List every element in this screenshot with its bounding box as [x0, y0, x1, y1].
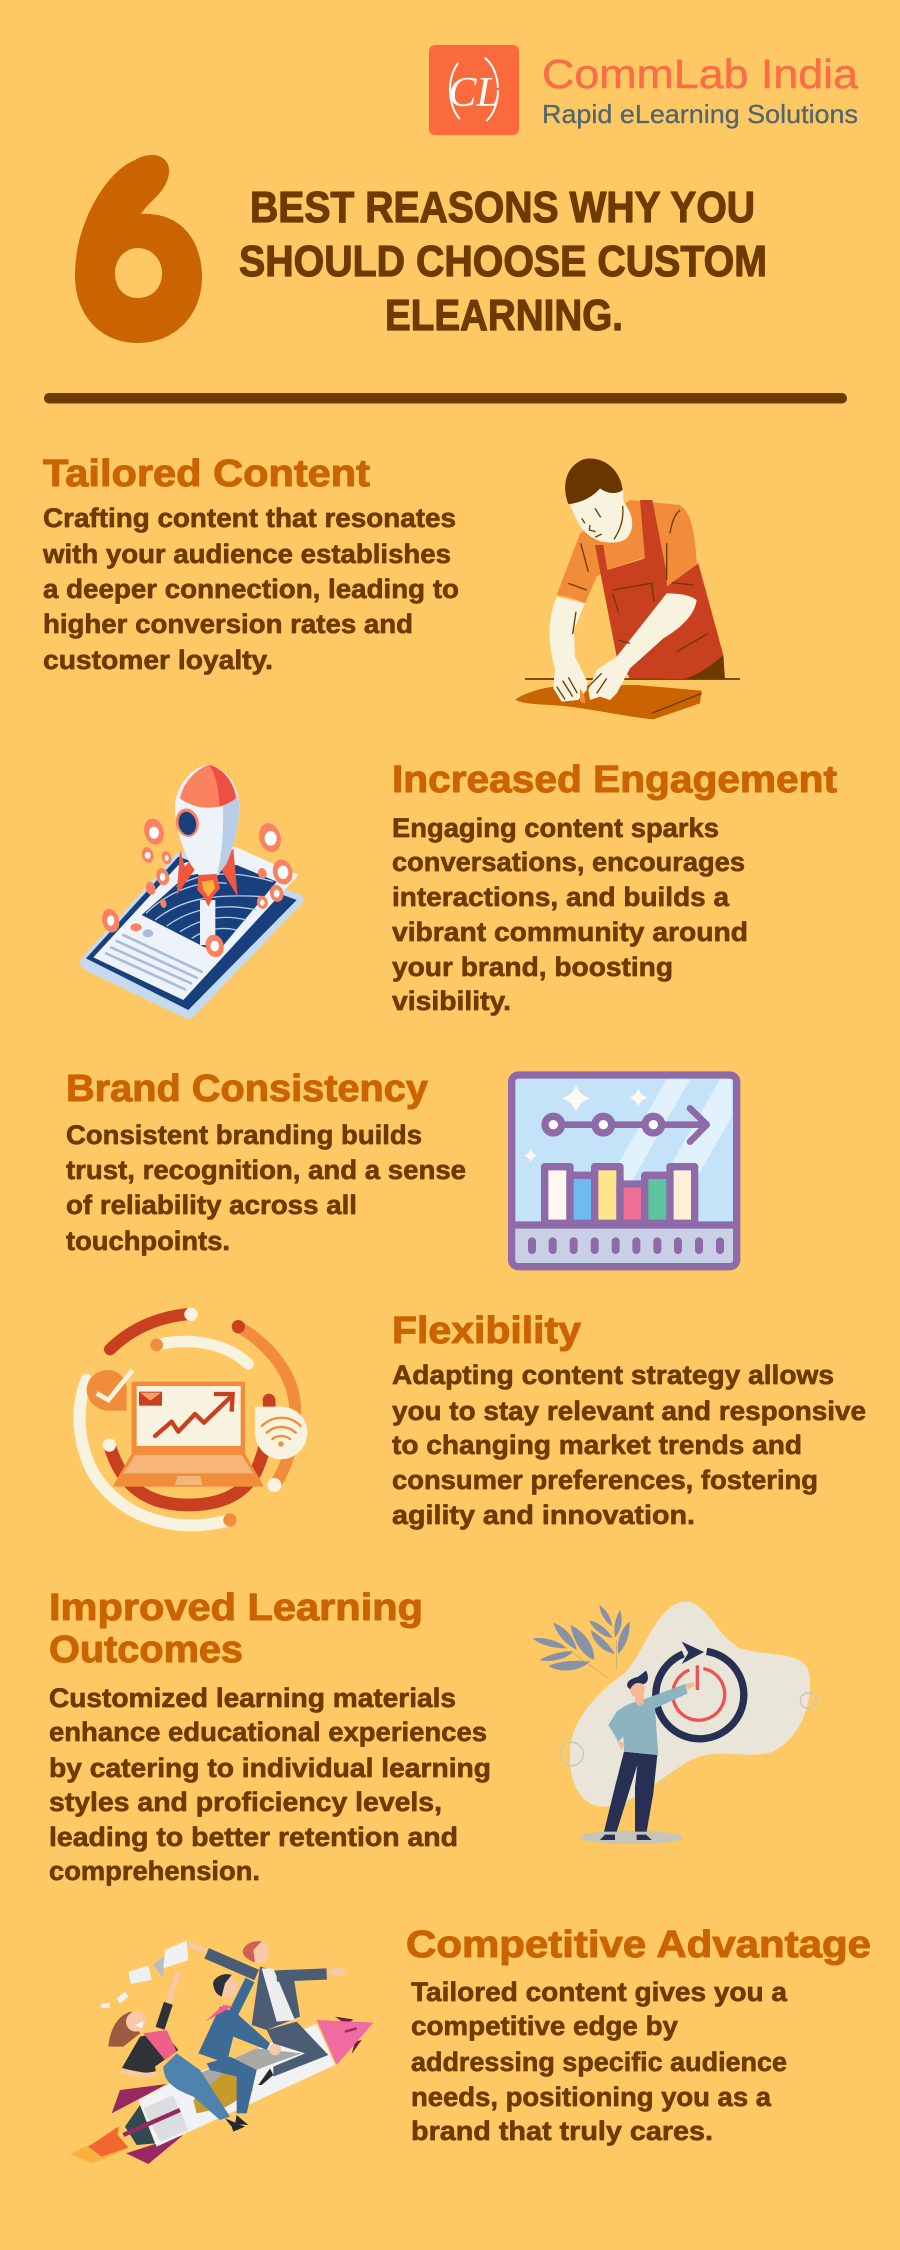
- icon: man pressing power button: [533, 1602, 816, 1844]
- title: ELEARNING.: [385, 291, 623, 340]
- text block: brand consistency: trust, recognition, and a sense: [66, 1155, 466, 1185]
- text block: tailored content: customer loyalty.: [43, 645, 273, 675]
- logo: CommLab India: [429, 45, 858, 135]
- text block: improved learning outcomes: leading to better retention and: [49, 1822, 458, 1852]
- title: SHOULD CHOOSE CUSTOM: [239, 237, 767, 286]
- text block: increased engagement: vibrant community around: [392, 917, 748, 947]
- heading: increased engagement: Increased Engagement: [392, 759, 837, 801]
- panel: increased engagement: [80, 759, 837, 1019]
- logo: CommLab India: Rapid eLearning Solutions: [542, 99, 858, 129]
- text block: tailored content: [42, 503, 459, 675]
- heading: improved learning outcomes: Improved Learning: [49, 1587, 423, 1629]
- icon: dashboard chart: [512, 1075, 737, 1267]
- text block: tailored content: Crafting content that resonates: [43, 503, 456, 533]
- title: BEST REASONS WHY YOU: [250, 183, 755, 232]
- text block: competitive advantage: brand that truly cares.: [411, 2116, 713, 2146]
- text block: competitive advantage: [411, 1977, 787, 2146]
- logo: CommLab India: CommLab India: [542, 51, 858, 97]
- text block: brand consistency: [66, 1120, 466, 1256]
- text block: improved learning outcomes: [49, 1683, 491, 1886]
- text block: flexibility: agility and innovation.: [392, 1500, 695, 1530]
- icon: craftsman cutting cloth: [515, 458, 740, 719]
- text block: competitive advantage: needs, positioning you as a: [411, 2082, 771, 2112]
- text block: flexibility: [392, 1360, 866, 1530]
- heading: improved learning outcomes: Outcomes: [49, 1629, 243, 1671]
- text block: brand consistency: of reliability across all: [66, 1190, 357, 1220]
- text block: improved learning outcomes: comprehension.: [49, 1856, 260, 1886]
- panel: brand consistency: [66, 1068, 737, 1267]
- heading: tailored content: Tailored Content: [43, 453, 370, 495]
- text block: increased engagement: Engaging content sparks: [392, 813, 719, 843]
- text block: increased engagement: visibility.: [392, 986, 511, 1016]
- text block: improved learning outcomes: Customized learning materials: [49, 1683, 456, 1713]
- text block: increased engagement: conversations, encourages: [392, 847, 745, 877]
- heading: brand consistency: Brand Consistency: [66, 1068, 428, 1110]
- text block: improved learning outcomes: styles and proficiency levels,: [49, 1787, 442, 1817]
- text block: improved learning outcomes: enhance educational experiences: [49, 1717, 487, 1747]
- text block: flexibility: you to stay relevant and responsive: [392, 1396, 866, 1426]
- panel: flexibility: [80, 1308, 866, 1530]
- panel: improved learning outcomes: [49, 1587, 816, 1886]
- big number 6: [75, 155, 202, 343]
- text block: competitive advantage: addressing specific audience: [411, 2047, 787, 2077]
- text block: tailored content: a deeper connection, leading to: [43, 574, 459, 604]
- text block: increased engagement: [392, 813, 748, 1016]
- logo: CommLab India: CL: [448, 70, 500, 116]
- text block: tailored content: with your audience establishes: [42, 539, 451, 569]
- icon: team riding a rocket: [70, 1940, 373, 2164]
- text block: flexibility: consumer preferences, fostering: [392, 1465, 818, 1495]
- text block: brand consistency: touchpoints.: [66, 1226, 230, 1256]
- heading: flexibility: Flexibility: [392, 1310, 581, 1352]
- panel: competitive advantage: [70, 1924, 871, 2164]
- heading: competitive advantage: Competitive Advantage: [406, 1924, 871, 1966]
- text block: competitive advantage: Tailored content gives you a: [411, 1977, 787, 2007]
- text block: competitive advantage: competitive edge by: [411, 2011, 678, 2041]
- text block: brand consistency: Consistent branding builds: [66, 1120, 422, 1150]
- icon: rocket launching from tablet: [80, 765, 303, 1019]
- text block: increased engagement: interactions, and builds a: [392, 882, 729, 912]
- icon: laptop with growth chart and rings: [80, 1308, 307, 1527]
- text block: increased engagement: your brand, boosting: [392, 952, 673, 982]
- text block: improved learning outcomes: by catering to individual learning: [49, 1753, 491, 1783]
- heading: improved learning outcomes: [49, 1587, 423, 1671]
- panel: tailored content: [42, 453, 740, 719]
- text block: flexibility: Adapting content strategy allows: [392, 1360, 834, 1390]
- title: [239, 183, 767, 340]
- text block: flexibility: to changing market trends and: [392, 1430, 802, 1460]
- text block: tailored content: higher conversion rates and: [43, 609, 413, 639]
